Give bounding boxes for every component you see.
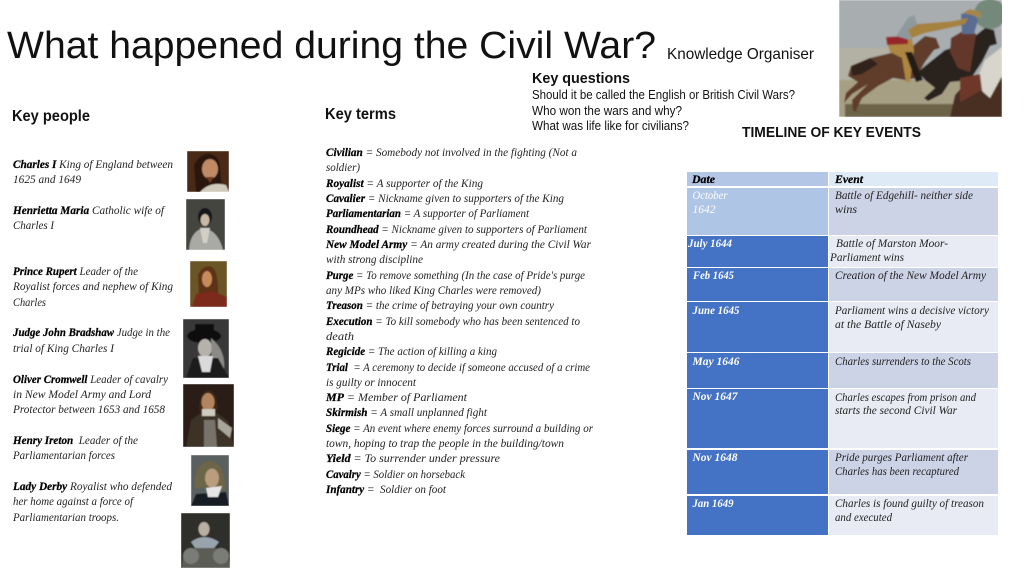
row: Nov 1647: Charles escapes from prison and [835,390,977,404]
portrait: Prince Rupert [190,261,227,307]
key terms list: town, hoping to trap the people in the building/town [326,436,564,450]
key terms list: Cavalry = Soldier on horseback [326,467,466,481]
row: July 1644: July 1644 [687,236,732,250]
row: Jan 1649: and executed [835,510,893,524]
row: June 1645: June 1645 [692,303,740,317]
key people list: Oliver Cromwell Leader of cavalry [13,372,169,386]
timeline table [687,172,998,535]
key people list: Parliamentarian troops. [12,510,119,524]
key people list: Protector between 1653 and 1658 [12,402,165,416]
key terms list: New Model Army = An army created during the Civil War [325,237,591,251]
row: Nov 1648: Nov 1648 [692,450,738,464]
key terms list: Purge = To remove something (In the case of Pride's purge [326,268,586,282]
table header row: Event [834,172,864,186]
key terms list: is guilty or innocent [326,375,417,389]
key terms list: Treason = the crime of betraying your own country [326,298,555,312]
heading: key questions: Key questions [532,70,630,87]
key people list: Lady Derby Royalist who defended [12,479,173,493]
row: Jan 1649 [687,496,998,535]
key people list: 1625 and 1649 [13,172,81,186]
right rider [950,28,976,72]
portrait: Charles I [187,151,229,192]
key questions text [532,88,795,133]
key terms list: MP = Member of Parliament [325,390,468,404]
row: July 1644: Parliament wins [829,250,904,264]
table header row [687,172,998,186]
key terms list: Yield = To surrender under pressure [326,451,501,465]
key terms list: Regicide = The action of killing a king [325,344,497,358]
key terms list: Skirmish = A small unplanned fight [326,405,488,419]
row: July 1644 [687,236,998,267]
row: June 1645: Parliament wins a decisive victory [834,303,990,317]
key questions text: What was life like for civilians? [532,119,689,133]
key terms list: Roundhead = Nickname given to supporters of Parliament [325,222,588,236]
portrait: Oliver Cromwell [183,384,234,447]
key people list: trial of King Charles I [13,341,115,355]
painting: cavalry battle [839,0,1006,117]
row: June 1645 [687,302,998,352]
row: Feb 1645: Feb 1645 [692,268,734,282]
row: October 1642: wins [835,202,857,216]
key terms list: Siege = An event where enemy forces surround a building or [326,421,593,435]
key terms list: Parliamentarian = A supporter of Parliament [326,206,530,220]
key terms list: Trial = A ceremony to decide if someone accused of a crime [326,360,591,374]
row: May 1646: Charles surrenders to the Scots [835,354,971,368]
row: Nov 1647: Nov 1647 [692,389,738,403]
row: October 1642: October [692,188,728,202]
left horse [844,36,940,112]
portrait: Henry Ireton [191,455,229,506]
row: October 1642 [687,188,998,235]
portrait: Lady Derby [181,513,230,568]
right black horse [918,28,997,101]
title: What happened during the Civil War? [7,25,656,67]
heading: key terms: Key terms [325,106,396,123]
key terms list [325,145,593,496]
key people list: Charles [13,295,46,309]
row: October 1642: Battle of Edgehill- neither side [835,188,974,202]
key people list: in New Model Army and Lord [13,387,152,401]
key terms list: Infantry = Soldier on foot [325,482,447,496]
key terms list: with strong discipline [326,252,424,266]
key people list: Henry Ireton Leader of the [12,433,139,447]
white horse and brown horse [950,76,1002,117]
row: Feb 1645 [687,268,998,301]
key people list: her home against a force of [13,494,135,508]
key terms list: Cavalier = Nickname given to supporters of the King [326,191,564,205]
row: Nov 1648 [687,450,998,494]
portrait: Judge John Bradshaw [183,319,229,378]
key people list [12,157,173,524]
subtitle: Knowledge Organiser [667,46,815,63]
key questions text: Who won the wars and why? [532,104,682,118]
key terms list: death [326,329,354,343]
portrait: Henrietta Maria [186,199,225,250]
key terms list: any MPs who liked King Charles were removed) [326,283,541,297]
row: Nov 1647: starts the second Civil War [835,403,957,417]
row: Nov 1648: Pride purges Parliament after [834,450,968,464]
key people list: Henrietta Maria Catholic wife of [12,203,166,217]
key people list: Charles I [13,218,55,232]
heading: timeline: TIMELINE OF KEY EVENTS [742,124,921,141]
key terms list: soldier) [326,160,360,174]
heading: key people: Key people [12,108,90,125]
row: Feb 1645: Creation of the New Model Army [835,268,987,282]
row: Jan 1649: Charles is found guilty of treason [835,496,984,510]
table header row: Date [691,172,716,186]
key people list: Royalist forces and nephew of King [12,279,173,293]
key people list: Judge John Bradshaw Judge in the [12,325,171,339]
row: June 1645: at the Battle of Naseby [835,317,942,331]
key terms list: Royalist = A supporter of the King [325,176,483,190]
row: October 1642: 1642 [692,202,716,216]
key people list: Charles I King of England between [13,157,173,171]
row: Nov 1647 [687,389,998,448]
left rider [887,38,914,82]
row: May 1646: May 1646 [692,354,740,368]
key people list: Parliamentarian forces [12,448,115,462]
row: May 1646 [687,353,998,388]
row: Jan 1649: Jan 1649 [692,496,734,510]
key terms list: Civilian = Somebody not involved in the fighting (Not a [326,145,577,159]
key terms list: Execution = To kill somebody who has been sentenced to [325,314,580,328]
key questions text: Should it be called the English or British Civil Wars? [532,88,795,102]
row: Nov 1648: Charles has been recaptured [835,464,960,478]
row: July 1644: Battle of Marston Moor- [836,236,948,250]
key people list: Prince Rupert Leader of the [13,264,139,278]
